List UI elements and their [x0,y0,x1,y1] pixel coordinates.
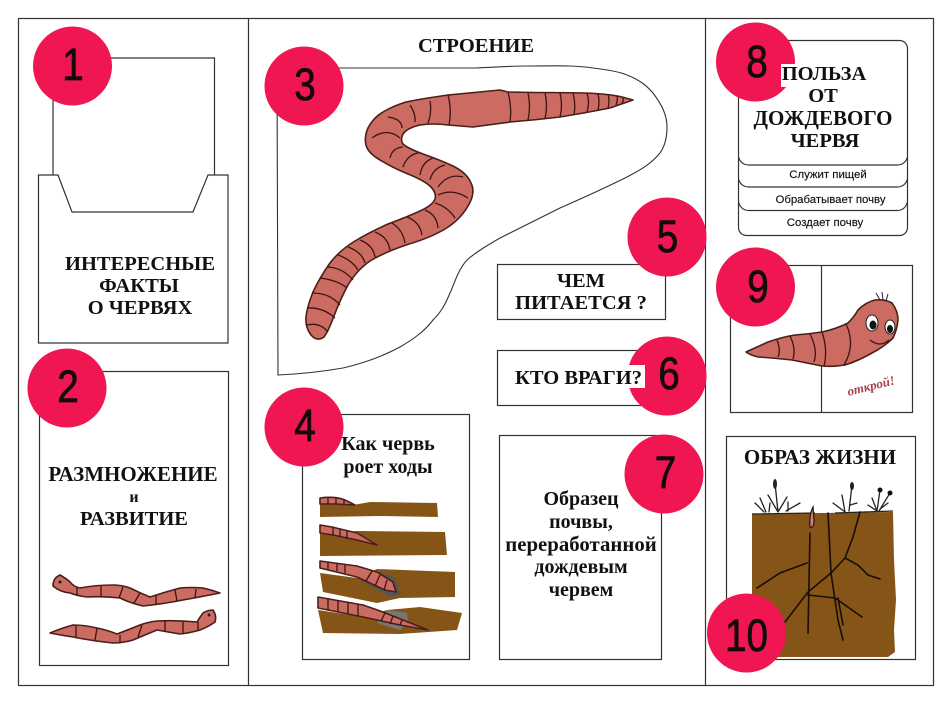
number badge 10 [707,594,786,672]
text: soil sample description: червем [549,579,613,601]
heading: what it eats: ЧЕМ [557,270,605,292]
tab labels: Обрабатывает почву [775,194,886,206]
number badge 4: 4 [294,400,316,451]
heading: how the worm digs: Как червь [341,433,435,455]
heading: benefit of the earthworm: ЧЕРВЯ [791,130,860,152]
cartoon worm [746,292,898,366]
heading: reproduction and development [48,462,218,530]
digging step 2 [320,525,447,556]
earthworm [306,90,633,339]
panel 2: reproduction [28,348,228,666]
heading: way of life: ОБРАЗ ЖИЗНИ [744,445,896,469]
number badge 7 [624,434,704,514]
heading: what it eats: ПИТАЕТСЯ ? [515,292,647,314]
panel 6: enemies [498,336,706,416]
tab labels: Служит пищей [789,169,867,181]
digging step 1 [320,497,438,517]
heading: benefit of the earthworm: ДОЖДЕВОГО [754,106,892,130]
number badge 8: 8 [746,36,768,87]
panel 10: way of life [707,436,916,672]
panel 8: benefits [716,22,908,236]
panel 5: what it eats [498,198,706,320]
tab labels: Создает почву [787,217,864,229]
digging step 4 [318,597,462,634]
number badge 7: 7 [655,447,676,498]
panel 1: interesting facts [33,26,228,343]
text: soil sample description: Образец [543,488,619,510]
text: soil sample description: дождевым [534,556,628,578]
heading: benefit of the earthworm: ПОЛЬЗА [782,63,866,85]
text: soil sample description: переработанной [505,533,657,556]
digging step 3 [320,561,455,603]
number badge 1 [33,26,112,106]
heading: benefit of the earthworm [754,63,892,152]
number badge 10: 10 [725,610,768,661]
soil cross-section [752,507,896,657]
heading: who are the enemies: КТО ВРАГИ? [515,367,642,389]
plants [755,479,892,512]
panel 3: structure [264,35,667,375]
text: soil sample description: почвы, [549,511,613,533]
panel 7: soil sample [500,434,704,660]
heading: how the worm digs: роет ходы [343,456,433,478]
heading: structure: СТРОЕНИЕ [418,35,534,57]
heading: interesting facts [65,253,215,319]
number badge 6 [628,336,706,416]
tab labels [775,169,886,229]
number badge 3: 3 [294,59,316,110]
number badge 4 [264,388,344,466]
heading: reproduction and development: и [129,489,139,506]
heading: interesting facts: ФАКТЫ [99,275,179,297]
envelope pocket [38,175,228,343]
number badge 2: 2 [57,361,79,412]
lower worm [50,610,216,643]
worm outline shape [277,66,667,375]
heading: benefit of the earthworm: ОТ [808,85,838,107]
number badge 2 [28,348,106,428]
upper worm [53,575,220,606]
number badge 8 [716,22,795,102]
number badge 9 [716,248,795,326]
heading: interesting facts: О ЧЕРВЯХ [88,297,192,319]
panel 9: worm fold-out [716,248,912,412]
heading: reproduction and development: РАЗМНОЖЕНИЕ [48,462,218,486]
card with tabs [738,40,908,236]
number badge 6: 6 [658,348,680,399]
heading: interesting facts: ИНТЕРЕСНЫЕ [65,253,215,275]
heading: what it eats [515,270,647,314]
heading: how the worm digs [341,433,435,478]
number badge 5: 5 [657,211,678,262]
panel 4: how the worm digs [264,388,470,660]
number badge 1: 1 [62,39,84,90]
open label: открой! [846,372,896,399]
envelope back [53,58,214,175]
number badge 9: 9 [747,261,769,312]
number badge 3 [264,46,344,126]
heading: reproduction and development: РАЗВИТИЕ [80,508,188,530]
number badge 5 [628,198,706,276]
text: soil sample description [505,488,657,601]
